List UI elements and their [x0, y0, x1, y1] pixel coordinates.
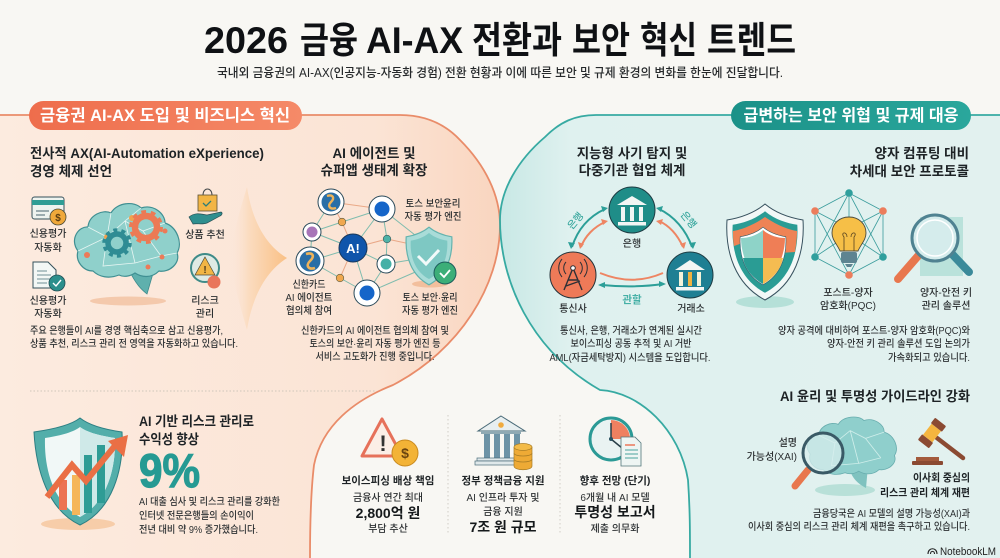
text: voice phishing: 2,800억 원: [356, 505, 420, 521]
icon: shield with rising chart: [34, 418, 128, 530]
heading: enterprise AX: 전사적 AX(AI-Automation eXperience): [30, 146, 264, 161]
heading: AI risk management: 수익성 향상: [139, 432, 200, 447]
heading: AI agent: AI 에이전트 및: [332, 146, 416, 161]
label: risk management: [191, 295, 219, 320]
icon: warning with coin: [362, 419, 418, 466]
description: agent: 신한카드의 AI 에이전트 협의체 참여 및: [301, 324, 449, 337]
heading: enterprise AX: 경영 체제 선언: [30, 164, 112, 179]
text: policy finance: [461, 474, 545, 535]
text: outlook: 투명성 보고서: [574, 504, 656, 520]
label: credit scoring 2: 신용평가: [30, 295, 66, 307]
panel: security threats background: [500, 115, 1000, 558]
title: 혁신: [640, 20, 697, 61]
chart: agent network: [296, 189, 420, 306]
label: arc left: 은행: [565, 210, 586, 232]
block: fraud detection: [550, 146, 713, 364]
text: policy finance: 정부 정책금융 지원: [461, 474, 545, 487]
section heading: right pill: [731, 101, 971, 130]
label: board governance: 리스크 관리 체계 재편: [880, 486, 970, 499]
text: voice phishing: 보이스피싱 배상 책임: [342, 474, 434, 487]
title: 트렌드: [707, 20, 796, 61]
text: outlook: 6개월 내 AI 모델: [580, 491, 650, 504]
icon: layered shield: [727, 204, 803, 308]
icon: clock with report: [590, 418, 641, 466]
block: AI ethics: [747, 389, 971, 533]
section heading: left pill: [29, 101, 302, 130]
icon: telecom node: [550, 252, 596, 298]
title: 전환과: [472, 20, 562, 61]
text: outlook: [574, 474, 656, 535]
label: XAI: [747, 437, 797, 463]
icon: exchange node: [667, 252, 713, 298]
description: quantum: 가속화되고 있습니다.: [888, 352, 970, 364]
title: AI-AX: [366, 20, 463, 61]
label: PQC: 포스트-양자: [823, 286, 873, 299]
description: enterprise AX: 주요 은행들이 AI를 경영 핵심축으로 삼고 신용평가,: [30, 324, 223, 337]
label: Shinhan card: AI 에이전트: [286, 292, 332, 304]
label: board governance: 이사회 중심의: [913, 471, 970, 484]
label: board governance: [880, 471, 970, 499]
heading: quantum: [850, 146, 969, 179]
panel: AI-AX adoption background: [0, 115, 500, 558]
icon: bank with coins: [475, 416, 532, 470]
description: enterprise AX: [30, 324, 238, 350]
label: toss engine bottom: 토스 보안·윤리: [402, 292, 458, 304]
description: profit: 전년 대비 약 9% 증가했습니다.: [139, 523, 258, 536]
label: Shinhan card: [286, 279, 332, 317]
icon: bag in hand: [189, 189, 222, 224]
heading: fraud detection: 지능형 사기 탐지 및: [577, 146, 687, 161]
description: profit: [139, 495, 280, 536]
label: credit scoring 2: [30, 295, 66, 320]
label: credit scoring 1: 신용평가: [30, 228, 66, 240]
arrows: collaboration cycle: [572, 209, 692, 286]
label: toss engine top: 자동 평가 엔진: [404, 211, 462, 223]
description: quantum: 양자 공격에 대비하여 포스트-양자 암호화(PQC)와: [778, 324, 970, 337]
subtitle: 국내외 금융권의 AI-AX(인공지능-자동화 경험) 전환 현황과 이에 따른 보안 및 규제 환경의 변화를 한눈에 진달합니다.: [217, 65, 783, 80]
title: 2026: [204, 20, 288, 61]
description: profit: 인터넷 전문은행들의 손이익이: [139, 510, 254, 522]
description: quantum: 양자-안전 키 관리 솔루션 도입 논의가: [827, 337, 970, 350]
heading: fraud detection: [577, 146, 687, 178]
chart: agent network: A!: [346, 241, 360, 256]
arrowheads: [568, 206, 696, 288]
block: quantum: [727, 146, 972, 364]
label: risk management: 관리: [196, 308, 214, 320]
description: fraud: AML(자금세탁방지) 시스템을 도입합니다.: [550, 351, 710, 364]
label: arc right: 은행: [678, 209, 699, 231]
heading: AI agent: 슈퍼앱 생태계 확장: [321, 162, 428, 178]
label: key management: [920, 286, 972, 312]
text: policy finance: 7조 원 규모: [469, 519, 537, 535]
title: 금융: [300, 20, 358, 61]
icon: magnifying glass: [898, 215, 969, 279]
heading: quantum: 양자 컴퓨팅 대비: [875, 146, 969, 161]
icon: lightbulb lattice: [811, 189, 887, 279]
label: risk management: 리스크: [191, 295, 219, 307]
label: toss engine bottom: 자동 평가 엔진: [402, 305, 458, 317]
label: product recommendation: 상품 추천: [185, 228, 225, 241]
heading: fraud detection: 다중기관 협업 체계: [579, 163, 685, 178]
icon: risk warning: [191, 254, 220, 288]
icon: document with check: [33, 262, 65, 291]
icon: brain with magnifier: [795, 417, 896, 496]
section heading: left pill: 금융권 AI-AX 도입 및 비즈니스 혁신: [40, 106, 290, 125]
icon: AI brain with gears: [74, 204, 179, 306]
description: agent: 토스의 보안·윤리 자동 평가 엔진 등: [310, 338, 440, 350]
heading: AI risk management: [139, 414, 254, 447]
label: PQC: 암호화(PQC): [820, 299, 876, 312]
description: fraud: [550, 324, 710, 364]
text: outlook: 제출 의무화: [591, 523, 639, 535]
label: credit scoring 1: [30, 228, 66, 254]
description: enterprise AX: 상품 추천, 리스크 관리 전 영역을 자동화하고 있습니다.: [30, 337, 238, 350]
panel outline: right: [500, 115, 1000, 558]
heading: AI risk management: AI 기반 리스크 관리로: [139, 414, 254, 429]
section heading: right pill: 급변하는 보안 위협 및 규제 대응: [744, 106, 958, 125]
label: toss engine bottom: [402, 292, 458, 317]
description: ethics: 이사회 중심의 리스크 관리 체계 재편을 촉구하고 있습니다.: [748, 520, 970, 533]
heading: enterprise AX: [30, 146, 264, 179]
panel outline: left: [0, 115, 500, 558]
description: fraud: 보이스피싱 공동 추적 및 AI 거반: [570, 338, 692, 350]
block: AI agent ecosystem: [286, 146, 462, 363]
block: enterprise AX: [30, 146, 264, 350]
label: key management: 관리 솔루션: [922, 299, 970, 312]
block: voice phishing: [342, 419, 434, 535]
icon: bank node: [609, 187, 655, 233]
icon: credit card with coin: [32, 197, 66, 225]
block: outlook: [574, 418, 656, 535]
label: toss engine top: 토스 보안윤리: [406, 198, 460, 210]
description: quantum: [778, 324, 970, 364]
icon: shield with check: [406, 227, 456, 288]
block: policy finance: [461, 416, 545, 535]
label: Shinhan card: 신한카드: [292, 279, 326, 291]
icon: risk warning: !: [203, 265, 207, 276]
icon: warning with coin: $: [401, 445, 409, 461]
description: fraud: 통신사, 은행, 거래소가 연계된 실시간: [560, 324, 702, 337]
label: PQC: [820, 286, 876, 312]
arrow: large chevron: [232, 187, 287, 330]
description: ethics: 금융당국은 AI 모델의 설명 가능성(XAI)과: [813, 507, 970, 520]
description: ethics: [748, 507, 970, 533]
icon: credit card with coin: $: [55, 213, 61, 224]
description: profit: AI 대출 심사 및 리스크 관리를 강화한: [139, 495, 280, 508]
label: XAI: 설명: [779, 437, 797, 449]
icon: warning with coin: !: [379, 431, 387, 456]
label: bank: 은행: [623, 238, 641, 250]
label: Shinhan card: 협의체 참여: [286, 304, 332, 317]
text: policy finance: AI 인프라 투자 및: [467, 492, 539, 504]
block: 9 percent profit: [34, 414, 280, 536]
description: agent: 서비스 고도화가 진행 중입니다.: [316, 350, 434, 363]
text: voice phishing: 부담 추산: [368, 522, 408, 535]
icon: gavel: [912, 418, 963, 465]
label: telecom: 통신사: [559, 303, 587, 315]
label: XAI: 가능성(XAI): [747, 451, 797, 463]
title: 보안: [572, 20, 630, 61]
label: credit scoring 2: 자동화: [34, 308, 62, 320]
text: voice phishing: [342, 474, 434, 535]
stat: 9 percent: 9%: [139, 444, 200, 497]
text: outlook: 향후 전망 (단기): [580, 474, 650, 487]
description: agent: [301, 324, 449, 363]
text: policy finance: 금융 지원: [483, 505, 523, 518]
label: toss engine top: [404, 198, 462, 223]
heading: AI agent: [321, 146, 428, 178]
label: arc bottom: 관할: [622, 293, 642, 306]
label: credit scoring 1: 자동화: [34, 242, 62, 254]
heading: quantum: 차세대 보안 프로토콜: [850, 164, 969, 179]
heading: AI ethics: AI 윤리 및 투명성 가이드라인 강화: [780, 389, 971, 404]
label: exchange: 거래소: [677, 303, 705, 315]
label: key management: 양자-안전 키: [920, 286, 972, 299]
text: voice phishing: 금융사 연간 최대: [353, 491, 423, 504]
